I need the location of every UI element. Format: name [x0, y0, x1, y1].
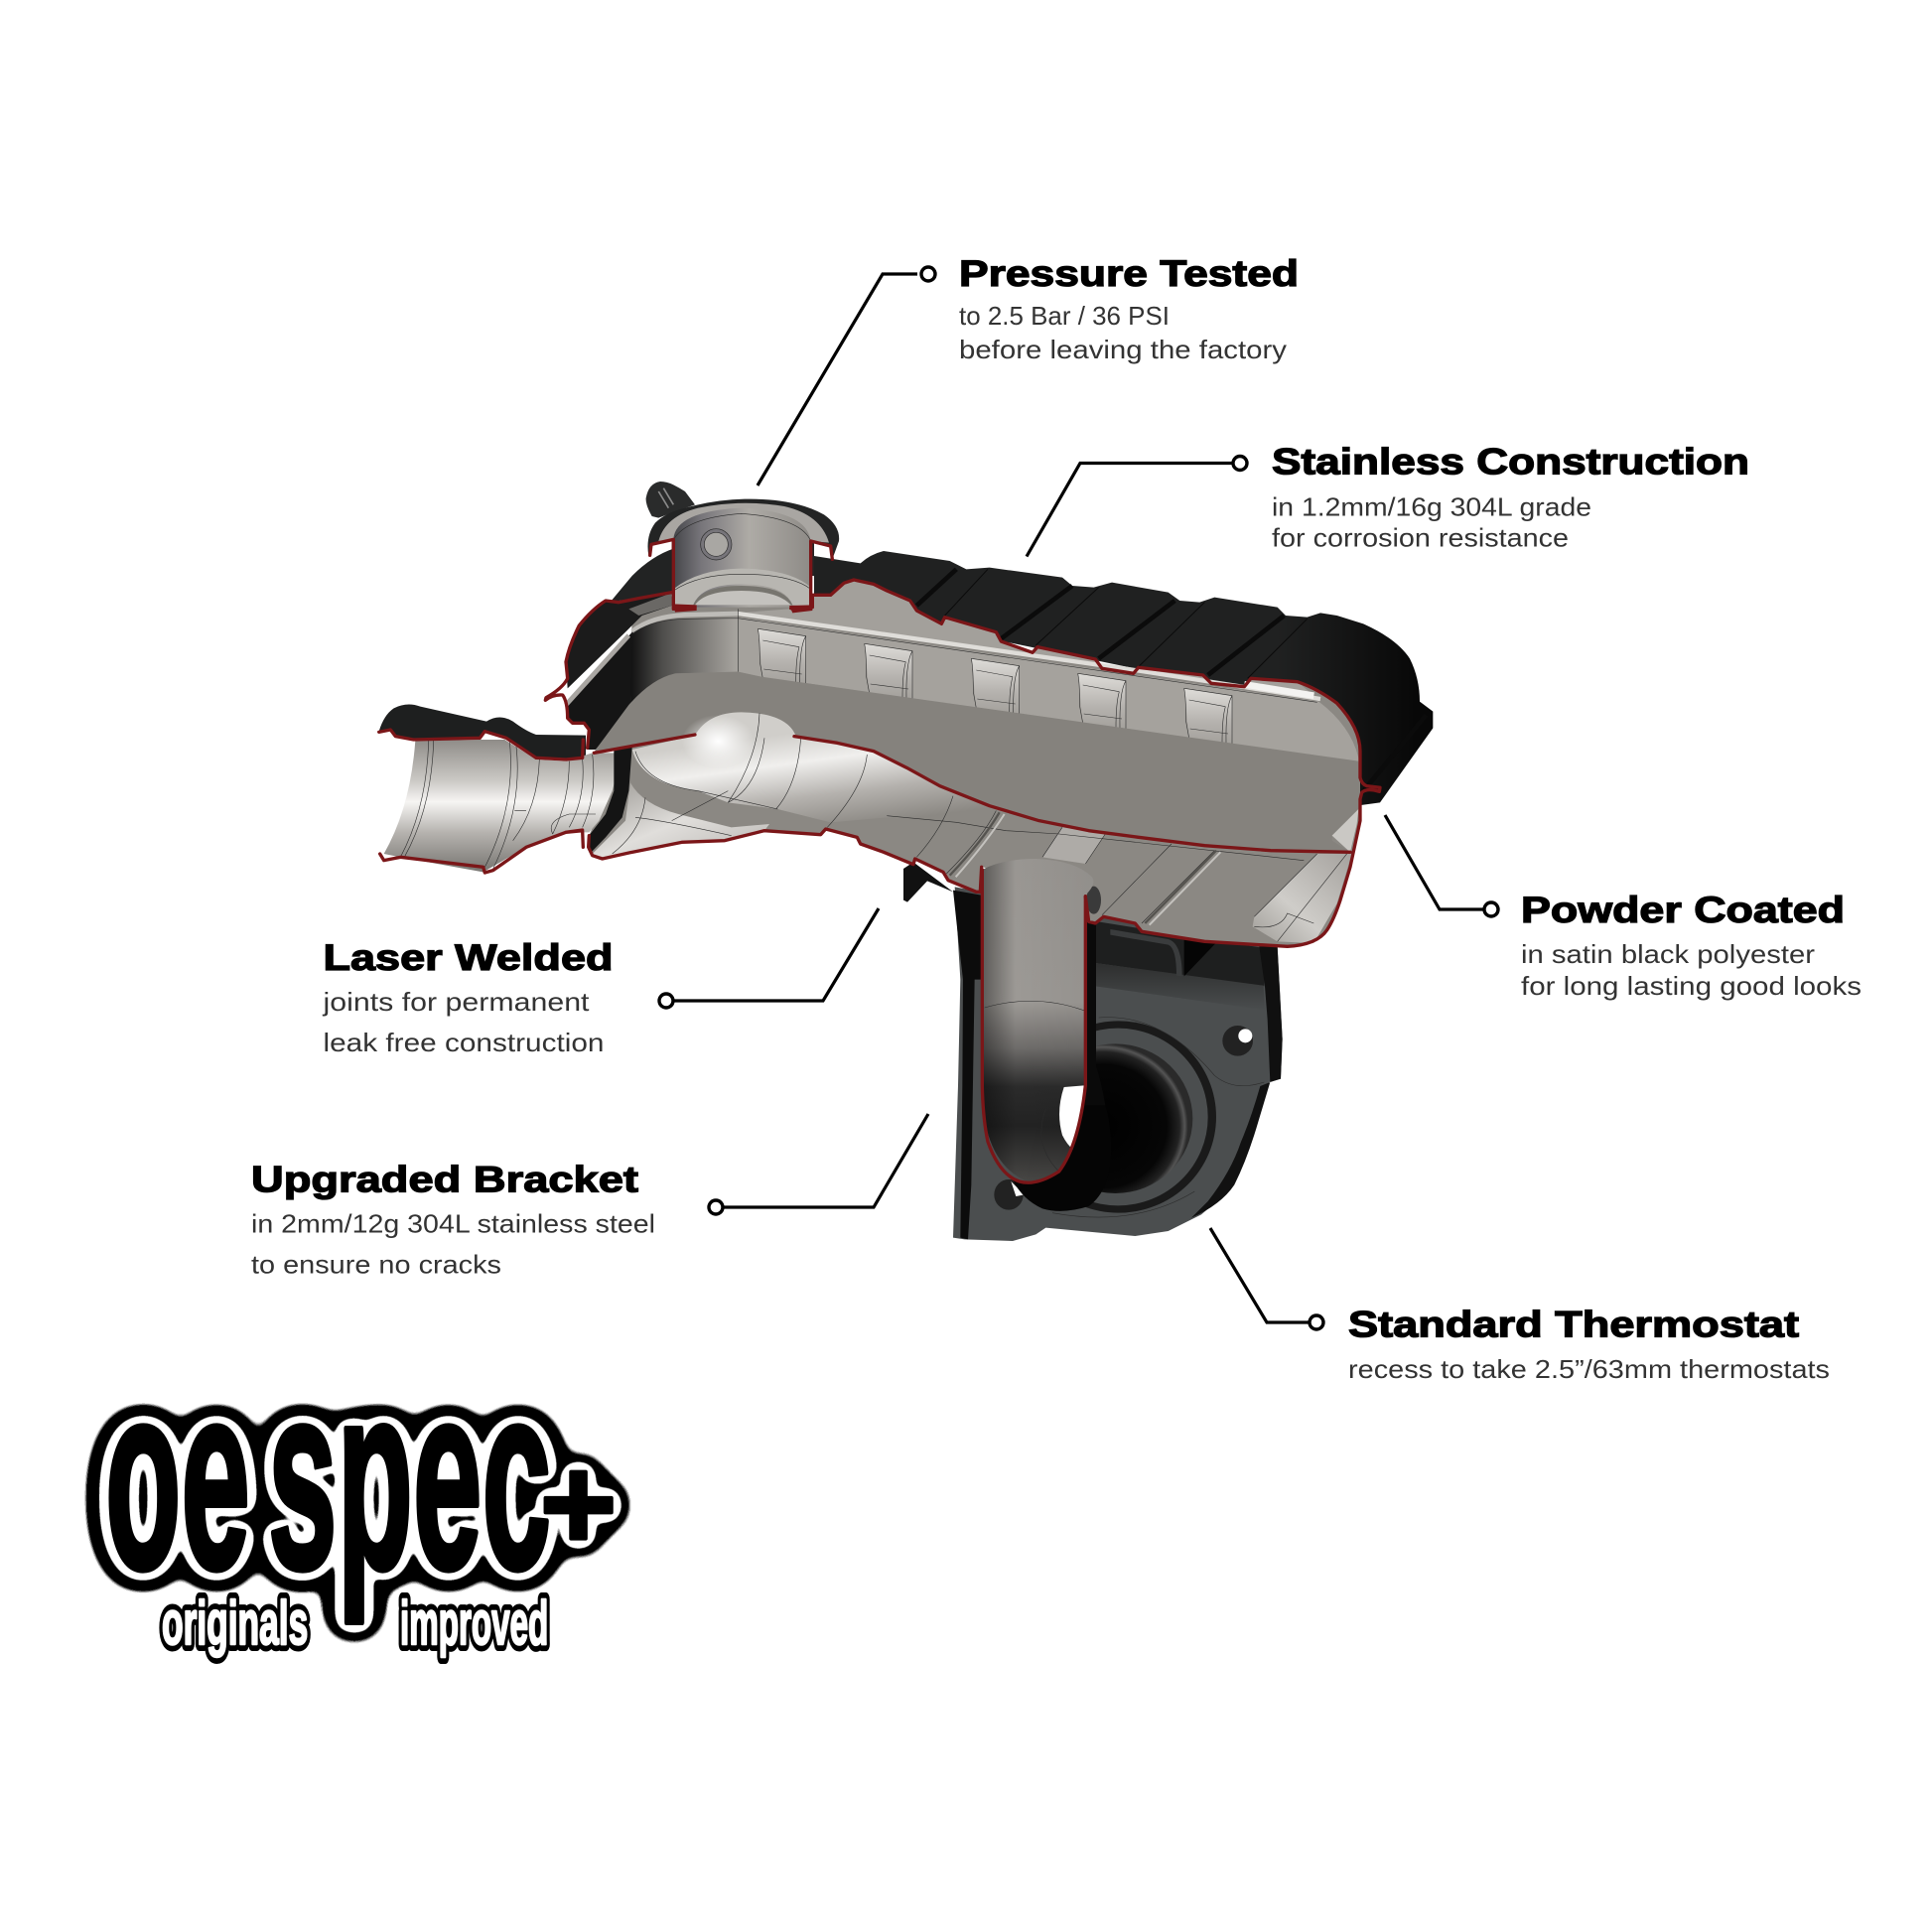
- callout: Powder Coated: for long lasting good looks: [1521, 971, 1862, 1001]
- tagline lettering: improved: [400, 1588, 548, 1658]
- callout: Pressure Tested: before leaving the factory: [959, 335, 1287, 364]
- neck section: [650, 539, 832, 609]
- logo white inner outline: spec: [268, 1329, 551, 1623]
- heading: Upgraded Bracket: [251, 1160, 638, 1199]
- flange highlight: [738, 614, 1320, 699]
- right end fin: [1253, 854, 1352, 943]
- logo white inner outline: +: [540, 1431, 617, 1577]
- logo wordmark: spec: [268, 1329, 551, 1623]
- red section cut outlines: [379, 539, 1380, 946]
- left profile: [545, 593, 672, 748]
- cutaway illustration: header tank: [379, 482, 1433, 1241]
- heading: Powder Coated: [1521, 890, 1845, 930]
- body text: in 2mm/12g 304L stainless steel: [251, 1209, 655, 1239]
- logo white inner outline: [105, 1329, 617, 1623]
- callout: Stainless Construction: for corrosion resistance: [1272, 522, 1569, 552]
- body text: in satin black polyester: [1521, 939, 1815, 969]
- floor ridges and contour lines: [613, 713, 1347, 941]
- callout: Upgraded Bracket: to ensure no cracks: [251, 1249, 501, 1279]
- body text: recess to take 2.5”/63mm thermostats: [1348, 1354, 1830, 1384]
- inlet silver body: [384, 740, 616, 872]
- heading: Standard Thermostat: [1348, 1305, 1799, 1344]
- top edge and right end of tank: [812, 580, 1380, 946]
- interior base: [589, 580, 1360, 946]
- hole through elbow: [1059, 1085, 1084, 1149]
- inlet outer black shell: [379, 705, 586, 760]
- pipe section outline: [982, 870, 1085, 1182]
- stamped tabs: [758, 628, 1232, 745]
- lower edge of tank: [589, 829, 982, 892]
- vent hole: [701, 529, 732, 560]
- black powder coated outer shell: [611, 549, 1433, 807]
- tagline lettering: originals: [162, 1587, 308, 1658]
- leader line: [1027, 463, 1234, 556]
- logo outer black outline: spec: [268, 1329, 551, 1623]
- filler neck with cap seat and hose barb: [646, 482, 839, 608]
- neck cylinder: [673, 508, 811, 608]
- upper wall: [630, 618, 1359, 762]
- inlet spout: [379, 705, 632, 872]
- logo wordmark: oe: [105, 1329, 250, 1623]
- callout: Stainless Construction: [1027, 441, 1749, 556]
- logo white inner outline: oe: [105, 1329, 250, 1623]
- heading: Stainless Construction: [1272, 441, 1749, 483]
- tagline outline: originals: [162, 1587, 308, 1658]
- callout: Standard Thermostat: [1210, 1228, 1830, 1384]
- pipe inner surface: [982, 859, 1093, 1182]
- logo outer black outline: [105, 1329, 617, 1623]
- lower seat ring: [673, 569, 811, 608]
- callout: Laser Welded: leak free construction: [324, 1028, 604, 1057]
- callout: Upgraded Bracket: [251, 1114, 928, 1279]
- leader line: [758, 274, 917, 485]
- body text: in 1.2mm/16g 304L grade: [1272, 492, 1591, 522]
- body text: joints for permanent: [322, 987, 590, 1017]
- tagline outline: improved: [400, 1588, 548, 1658]
- callout: Powder Coated: [1385, 815, 1862, 1001]
- callout: Laser Welded: [322, 908, 879, 1057]
- logo wordmark: +: [540, 1431, 617, 1577]
- silver runner tube: [632, 712, 1062, 832]
- logo: oe spec+ originals improved: [105, 1329, 617, 1658]
- flange: [647, 499, 839, 576]
- callout: Pressure Tested: [758, 253, 1299, 485]
- small stamped tab on the floor: [1042, 827, 1105, 864]
- inlet upper profile: [379, 730, 583, 759]
- logo outer black outline: oe: [105, 1329, 250, 1623]
- upper wall band above the highlight: [738, 580, 1317, 698]
- leader line: [1385, 815, 1486, 909]
- logo wordmark: [105, 1329, 617, 1623]
- outlet pipe: [982, 859, 1111, 1211]
- logo outer black outline: +: [540, 1431, 617, 1577]
- body text: to 2.5 Bar / 36 PSI: [959, 301, 1170, 331]
- hose barb nipple: [646, 482, 695, 518]
- leader line: [722, 1114, 928, 1207]
- mounting bracket: [903, 862, 1283, 1241]
- heading: Laser Welded: [324, 937, 614, 978]
- tank interior: [566, 580, 1360, 946]
- tagline outline: [162, 1587, 548, 1658]
- cut plane: [594, 672, 1360, 852]
- black elbow: [1013, 1079, 1111, 1211]
- dark left corner of the tank: [566, 630, 633, 750]
- tagline lettering: [162, 1587, 548, 1658]
- gap behind inlet: [590, 748, 632, 854]
- leader line: [1210, 1228, 1311, 1322]
- lower rim: [593, 782, 769, 859]
- leader line: [672, 908, 879, 1001]
- mid section curve: [594, 735, 1350, 852]
- heading: Pressure Tested: [959, 253, 1299, 294]
